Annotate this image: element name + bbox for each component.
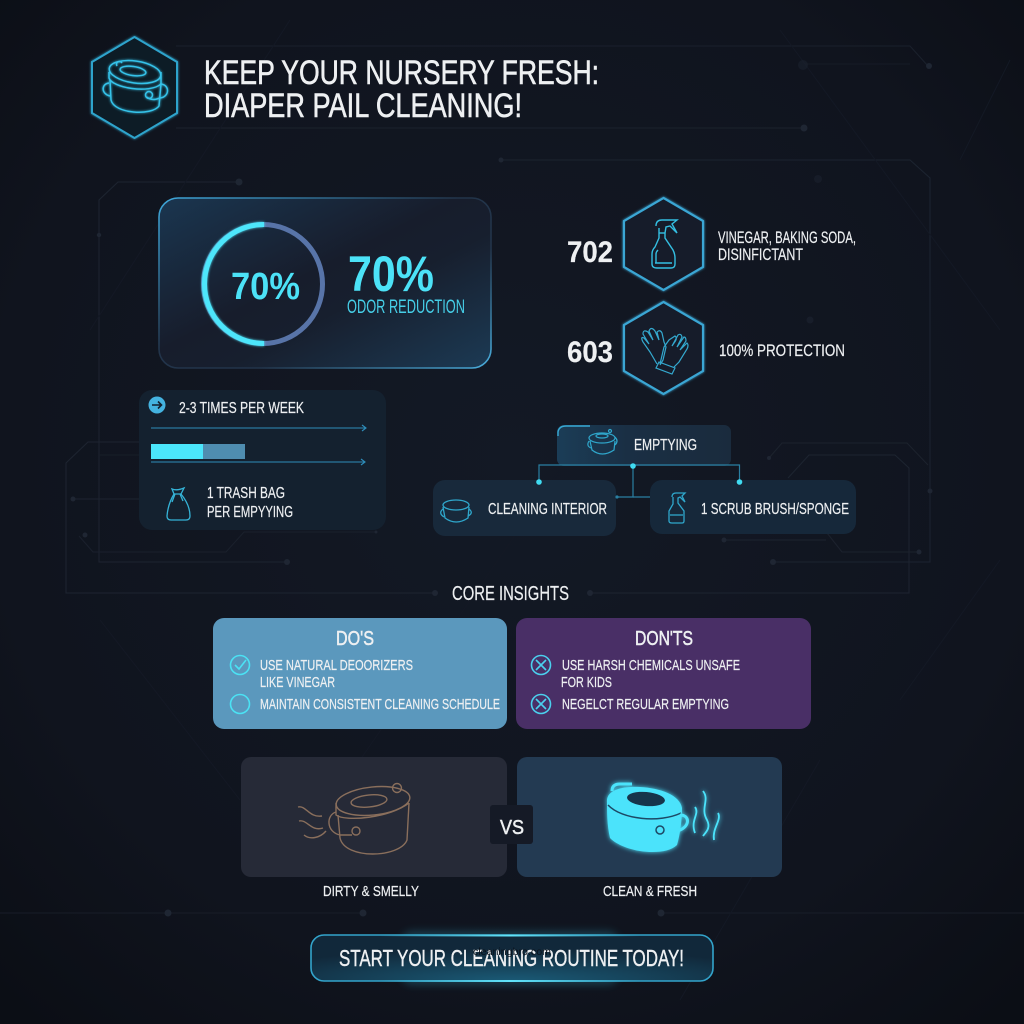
item: natural deodorizers — [230, 656, 413, 691]
item: consistent schedule — [230, 694, 500, 714]
heading: core insights: CORE INSIGHTS — [452, 583, 569, 605]
heading: do's: DO'S — [336, 628, 374, 650]
bar: frequency progress — [151, 444, 245, 459]
heading: don'ts: DON'TS — [635, 628, 693, 650]
vs badge: VS — [500, 817, 524, 839]
stat: 702 supplies — [567, 198, 856, 290]
call to action button: START YOUR CLEANING ROUTINE TODAY! — [339, 945, 684, 971]
node: emptying: EMPTYING — [634, 437, 697, 454]
title: KEEP YOUR NURSERY FRESH: — [204, 54, 599, 92]
panel: frequency and trash bag — [139, 390, 386, 530]
flow diagram: cleaning steps — [433, 425, 856, 536]
item: harsh chemicals: USE HARSH CHEMICALS UNSAFE — [562, 658, 740, 674]
label: clean: CLEAN & FRESH — [603, 884, 697, 900]
item: natural deodorizers: USE NATURAL DEOORIZERS — [260, 658, 413, 674]
title: DIAPER PAIL CLEANING! — [204, 87, 522, 125]
item: natural deodorizers: LIKE VINEGAR — [260, 675, 335, 691]
text: supplies: DISINFICTANT — [718, 246, 803, 264]
icon: arrow circle — [148, 396, 166, 414]
item: neglect emptying — [532, 694, 729, 714]
item: consistent schedule: MAINTAIN CONSISTENT CLEANING SCHEDULE — [260, 697, 500, 713]
icon: clean pail — [607, 784, 719, 852]
text: supplies: VINEGAR, BAKING SODA, — [718, 229, 856, 247]
arrow: upper — [151, 425, 366, 431]
connectors — [536, 463, 742, 499]
icon: dirty pail — [298, 783, 411, 854]
node: cleaning interior: CLEANING INTERIOR — [488, 501, 607, 518]
stat: 603 protection: 603 — [567, 336, 613, 369]
text: frequency: 2-3 TIMES PER WEEK — [179, 400, 305, 417]
stat value and label — [347, 246, 465, 318]
arrow: lower — [151, 459, 365, 465]
title — [204, 54, 599, 125]
text: supplies — [718, 229, 856, 264]
node: scrub brush: 1 SCRUB BRUSH/SPONGE — [701, 501, 849, 518]
icon: trash bag — [167, 488, 190, 520]
icon: spray bottle in hexagon — [624, 198, 703, 290]
label: dirty: DIRTY & SMELLY — [323, 884, 419, 900]
panel: do's — [213, 618, 507, 729]
donut chart: 70 percent: 70% — [231, 266, 300, 308]
text: trash bag: 1 TRASH BAG — [207, 485, 285, 502]
vs badge — [490, 805, 533, 844]
item: harsh chemicals — [532, 656, 740, 691]
panel: clean and fresh — [517, 757, 782, 900]
text: trash bag: PER EMPYYING — [207, 504, 293, 521]
stat value and label: 70% — [348, 246, 434, 302]
item: neglect emptying: NEGELCT REGULAR EMPTYING — [562, 697, 729, 713]
text: trash bag — [207, 485, 293, 521]
panel: don'ts — [516, 618, 811, 729]
watermark text: cleaningbro.com — [473, 947, 551, 958]
header icon: diaper pail in hexagon — [92, 37, 177, 138]
panel: dirty and smelly — [241, 757, 507, 900]
node: emptying — [557, 425, 731, 466]
stat: 702 supplies: 702 — [567, 236, 613, 269]
item: harsh chemicals: FOR KIDS — [561, 675, 612, 691]
node: scrub brush — [650, 480, 856, 534]
node: cleaning interior — [433, 480, 616, 536]
text: protection: 100% PROTECTION — [719, 341, 845, 360]
icon: gloves in hexagon — [624, 302, 703, 394]
panel: odor reduction stat card — [159, 198, 491, 368]
call to action button — [311, 931, 713, 985]
stat: 603 protection — [567, 302, 845, 394]
stat value and label: ODOR REDUCTION — [347, 297, 465, 318]
donut chart: 70 percent — [204, 224, 322, 344]
